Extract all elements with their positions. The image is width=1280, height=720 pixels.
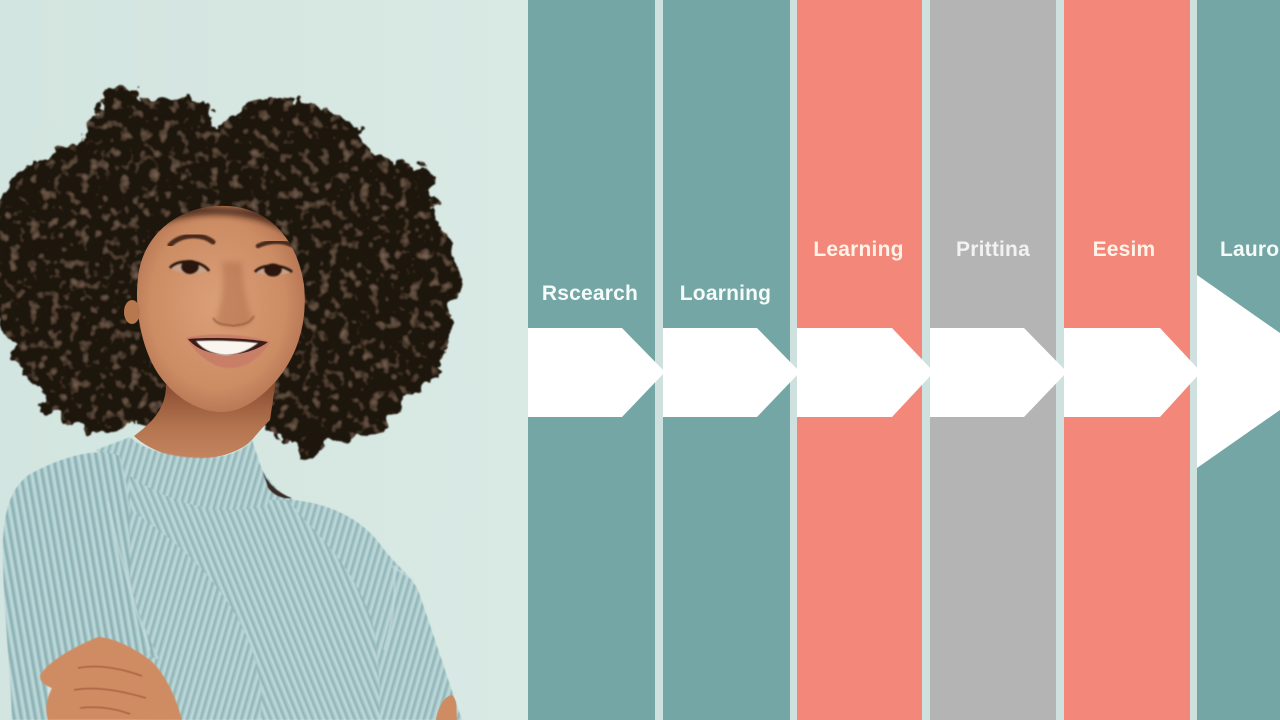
hairline shadow: [162, 206, 285, 237]
column 2: teal: [663, 0, 790, 720]
column 6: teal: [1197, 0, 1280, 720]
arrow 3: [797, 328, 934, 417]
sleeve seam: [108, 502, 414, 650]
column gaps backing: [528, 0, 1280, 720]
process columns: [528, 0, 1280, 720]
teeth: [196, 341, 258, 355]
left hand: [40, 637, 182, 720]
column 3: coral: [797, 0, 922, 720]
label: column 4: Prittina: [956, 238, 1030, 261]
column 5: coral: [1064, 0, 1190, 720]
left brow: [170, 236, 213, 245]
neck cutout shadow: [262, 470, 292, 499]
label: column 3: Learning: [813, 238, 904, 261]
sweater chest ribs: [130, 470, 380, 720]
right hand thumb: [436, 695, 457, 720]
arrow 2: [663, 328, 800, 417]
label: column 1: Rscearch: [542, 282, 638, 305]
nose tip: [213, 316, 254, 326]
label: column 5: Eesim: [1093, 238, 1155, 261]
arrow 1: [528, 328, 665, 417]
lips: [186, 335, 270, 368]
label: column 2: Loarning: [680, 282, 771, 305]
column labels: [542, 238, 1279, 305]
column 4: gray: [930, 0, 1056, 720]
arrow 5: [1064, 328, 1201, 417]
sweater torso: [60, 437, 462, 720]
mouth opening: [188, 338, 268, 355]
left photo background: [0, 0, 528, 720]
arrow 6: large, cropped: [1197, 275, 1280, 468]
sweater collar: [96, 437, 268, 510]
face: [137, 206, 305, 412]
facial features: [162, 206, 294, 368]
sweater: [3, 437, 462, 720]
column 1: teal: [528, 0, 655, 720]
finger creases: [74, 666, 146, 714]
sweater sleeve: [3, 452, 160, 720]
right eye: [255, 264, 292, 276]
arrow 4: [930, 328, 1067, 417]
ear: [124, 300, 140, 324]
hair: [0, 86, 460, 456]
label: column 6: Lauro: [1220, 238, 1279, 261]
neck: [134, 380, 276, 460]
right brow: [258, 242, 297, 248]
nose shading: [216, 262, 252, 328]
person photo illustration: [0, 86, 462, 720]
arrows: [528, 275, 1280, 468]
left eye: [170, 260, 209, 274]
